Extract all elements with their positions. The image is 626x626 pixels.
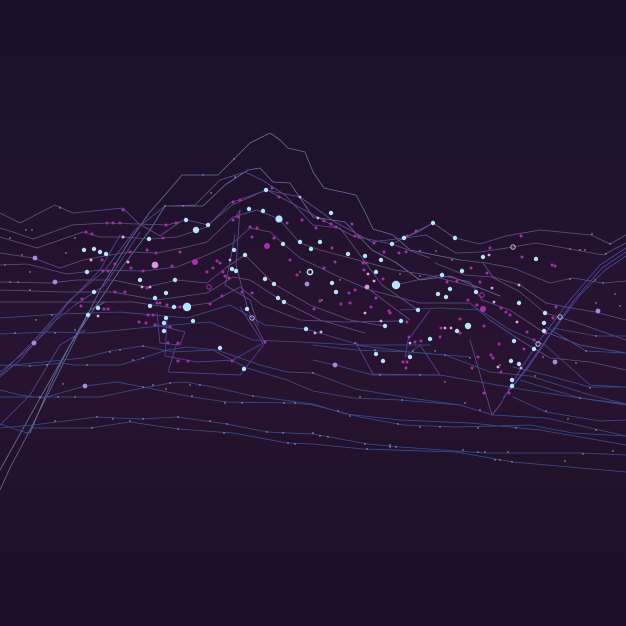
second ridge line bbox=[0, 168, 500, 470]
pink nodes bbox=[90, 196, 522, 369]
right upper waves bbox=[455, 230, 626, 244]
small magenta nodes bbox=[80, 186, 558, 394]
left converging lines bbox=[0, 232, 140, 377]
wave lines bbox=[0, 133, 626, 490]
large magenta and pink nodes bbox=[152, 243, 486, 312]
tiny line nodes bbox=[4, 158, 621, 463]
third ridge line bbox=[0, 172, 478, 375]
ring nodes bbox=[207, 245, 562, 346]
central loop lines bbox=[157, 313, 185, 345]
lower blue waves bbox=[0, 347, 626, 436]
far ridge line with main peak bbox=[0, 133, 460, 490]
steep right lines bbox=[492, 248, 626, 415]
lavender nodes bbox=[32, 256, 600, 388]
light blue nodes bbox=[82, 188, 547, 388]
upper left waves bbox=[0, 205, 180, 236]
